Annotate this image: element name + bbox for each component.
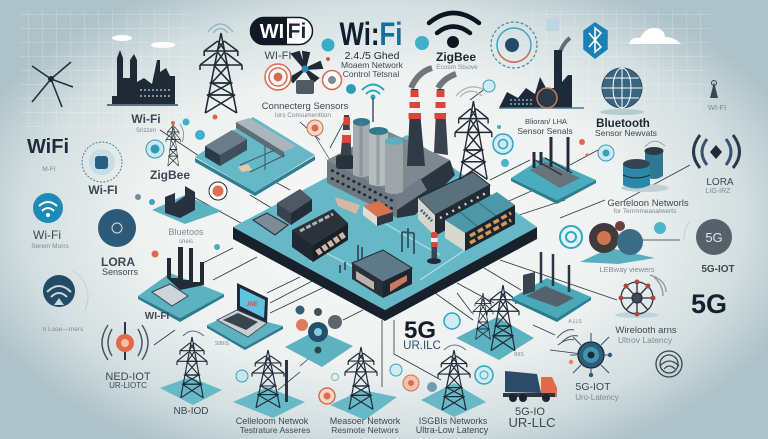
label: ZigBee top: [436, 50, 478, 71]
label: sensor networks ultra-low latency: Ultra-Low Latency: [416, 425, 489, 435]
logo: Wi:Fi large: Wi:Fi: [340, 16, 402, 52]
label: Wi-Fi left of ZigBee: Wi-FI: [88, 183, 118, 197]
label: cellular networks right: for Terrmmeasatwerts: [614, 208, 677, 215]
tall chimneys with smoke: [407, 68, 456, 166]
label: Connecting Sensors: Connecterg Sensors: [262, 101, 349, 112]
label: 5G-IoT ultra-latency: 5G-IOT: [575, 381, 611, 393]
icon: dark wifi circle: [43, 271, 88, 310]
panel: laptop pad: JNE: [246, 302, 258, 308]
platform base: [233, 227, 537, 321]
label: sensor signals: Blioran/ LHA: [525, 117, 567, 126]
panel: laptop pad: [207, 283, 283, 350]
panel: lower right plant pad: [512, 252, 591, 325]
label: NB-IoT URLLC left: UR-LIOTC: [109, 381, 147, 390]
icon: target with satellites: [557, 330, 612, 377]
label: wireless arms: Ultrov Latency: [618, 335, 673, 345]
icon: ZigBee wifi symbol: [415, 13, 479, 50]
icon: 5G circle: [684, 219, 732, 255]
logo: WiFi pill: [250, 17, 312, 45]
label: Bluetooth left: sneis: [179, 239, 193, 245]
main factory block: [327, 130, 455, 218]
tower: ZigBee small: [146, 114, 218, 166]
icon: right factory: [499, 38, 584, 108]
label: LoRa sensors: LORA: [101, 255, 135, 269]
icon: database barrels: [621, 141, 669, 192]
icon: 5G circle: 5G: [705, 230, 723, 245]
label: measure network: Resmote Networs: [331, 425, 399, 435]
label: WiFi left: M-FI: [42, 166, 56, 173]
label: 5G-IoT URLLC bottom: UR-LLC: [509, 415, 555, 430]
label: ZigBee top: ZigBee: [436, 50, 476, 64]
label: 5G-IoT URLLC bottom: [509, 406, 555, 430]
panel: central industrial platform: [233, 68, 537, 321]
panel: measure tower pad: [319, 347, 397, 420]
label: cellular networks right: Gerteloon Networls: [607, 198, 689, 209]
label: Wi-Fi right with pin: WI-FI: [708, 103, 726, 112]
label: sensor networks ultra-low latency: [416, 416, 489, 435]
label: Wi-Fi under factory: Wi-Fi: [131, 112, 161, 126]
label: ZigBee left: ZigBee: [150, 168, 190, 182]
small orange roof building: [363, 201, 393, 226]
icon: LoRa radio: [694, 135, 740, 168]
icon: cloud: [629, 28, 681, 44]
label: WiFi left: WiFi: [27, 136, 69, 158]
label: Wi-Fi right with pin: [708, 80, 726, 112]
icon: Bluetooth: [584, 23, 607, 58]
label: LoRa right: LIG-IRZ: [706, 188, 731, 195]
label: 5G-IoT ultra-latency: [575, 381, 619, 402]
label: ZigBee top: Ecosm Stsove: [436, 64, 478, 71]
label: cellular network: Testrature Asseres: [240, 425, 310, 435]
label: Wi-Fi near keyboard: WI-FI: [145, 311, 169, 322]
platform top: [233, 135, 537, 310]
striped stack on platform: [427, 232, 441, 264]
label: 5G-IoT right: 5G-IOT: [701, 264, 735, 275]
label: Wi-Fi with sub text: [31, 228, 70, 250]
panel: ZigBee machinery pad: [135, 182, 227, 224]
label: LoRa right: LORA: [706, 177, 734, 188]
bottom building: [352, 250, 412, 298]
large dark building: [292, 209, 348, 262]
label: LoRa right: [706, 177, 734, 195]
panel: cellular tower pad: SIBIIS: [215, 341, 230, 347]
label: cellular network: Celleloom Netwok: [236, 416, 309, 426]
panel: twin tower pad: BIIS: [514, 352, 524, 358]
panel: upper right equipment pad: [511, 137, 614, 204]
icon: seal: [82, 142, 122, 182]
icon: tower behind factory right: [455, 80, 513, 179]
label: sensor networks ultra-low latency: ISGBIs Networks: [419, 416, 488, 426]
label: measure network: Measoer Network: [330, 416, 401, 426]
left short chimney: [336, 115, 354, 169]
text block: frequency band: 2.4./5 Ghed: [345, 50, 400, 62]
label: Wi-Fi under factory: [131, 112, 161, 134]
label: Bluetooth left: Bluetoos: [168, 227, 204, 237]
panel: round sensors pad: [560, 221, 666, 264]
label: Bluetooth sensor networks: Sensor Newvats: [595, 128, 657, 138]
label: measure network: [330, 416, 401, 435]
text block: frequency band: Control Tetsnal: [343, 69, 399, 79]
panel: network cluster pad: [285, 306, 353, 367]
icon: delivery truck: [503, 371, 557, 402]
label: Wi-Fi with sub text: Serem Morrs: [31, 243, 70, 250]
icon: concentric ring badge: [491, 22, 537, 68]
label: 5G-IoT URLLC bottom: 5G-IO: [515, 406, 545, 418]
label: 5G URLLC center: [403, 317, 441, 352]
icon: dark globe: [98, 209, 136, 247]
upper right roof building: [418, 172, 490, 236]
panel: NB-IoT tower pad: [160, 331, 222, 405]
icon: wind turbine: [32, 62, 73, 107]
small machinery on platform: [340, 228, 414, 273]
label: LoRa sensors: Sensorrs: [102, 267, 139, 277]
label: NB-IOD: NB-IOD: [174, 406, 208, 417]
label: LoRa sensors: [101, 255, 139, 277]
text block: frequency band: Moaem Network: [341, 60, 404, 70]
decorative square: [546, 19, 559, 31]
label: Bluetooth sensor networks: [595, 118, 657, 138]
flat panel: [253, 213, 288, 235]
panel: keyboard pad: [138, 244, 224, 322]
label: wireless arms: [615, 325, 677, 345]
tower: upper left: [200, 24, 242, 113]
panel: upper left building pad: [195, 117, 330, 196]
small dark building: [277, 189, 312, 225]
text block: frequency band: [341, 50, 404, 79]
connection lines: [154, 85, 690, 390]
silos: [353, 118, 403, 194]
panel: cellular tower pad: [215, 341, 305, 418]
label: wireless arms: Wirelooth arns: [615, 325, 677, 336]
label: Wi-Fi under factory: Srizzen: [136, 128, 156, 134]
label: low-power networks: LEBway viewers: [599, 265, 655, 274]
logo: WiFi pill: WI: [260, 21, 284, 43]
icon: globe: [600, 68, 644, 115]
label: sensor signals: Sensor Senals: [517, 126, 573, 136]
label: big 5G right: 5G: [691, 289, 727, 319]
label: cellular networks right: [607, 198, 689, 215]
label: Connecting Sensors: lors Consumenttion: [275, 112, 331, 119]
icon: radio with red core: [102, 322, 148, 360]
icon: fan with targets: [265, 38, 342, 94]
label: cellular network: [236, 416, 310, 435]
panel: lower right plant pad: A LLS: [568, 319, 582, 325]
label: sensor signals: [517, 117, 573, 136]
panel: lower middle tower pad: [390, 345, 493, 417]
icon: teal wifi on pole: [346, 84, 384, 122]
label: 5G URLLC center: 5G: [404, 317, 436, 344]
label: NB-IoT URLLC left: [105, 371, 151, 390]
label: faint caption: n Lsoe—mers: [43, 326, 84, 333]
label: Bluetooth sensor networks: Bluetooth: [596, 118, 650, 130]
label: Connecting Sensors: [262, 101, 349, 119]
icon: mesh hub: [615, 275, 666, 318]
label: 5G-IoT ultra-latency: Uro-Latency: [575, 393, 619, 402]
teal roof building: [445, 192, 515, 251]
label: Wi-Fi with sub text: Wi-Fi: [33, 228, 61, 242]
label: NB-IoT URLLC left: NED-IOT: [105, 371, 151, 383]
icon: wifi circle: [33, 193, 63, 223]
icon: left factory with clouds: [107, 35, 178, 105]
icon: spiral signal: [656, 351, 682, 377]
label: WiFi left: [27, 136, 69, 173]
label: Bluetooth left: [168, 227, 204, 245]
label: Wi-Fi: WI-FI: [265, 50, 291, 62]
logo: WiFi pill: Fi: [288, 20, 306, 43]
label: 5G URLLC center: UR.ILC: [403, 340, 441, 352]
panel: twin tower pad: [444, 285, 534, 360]
